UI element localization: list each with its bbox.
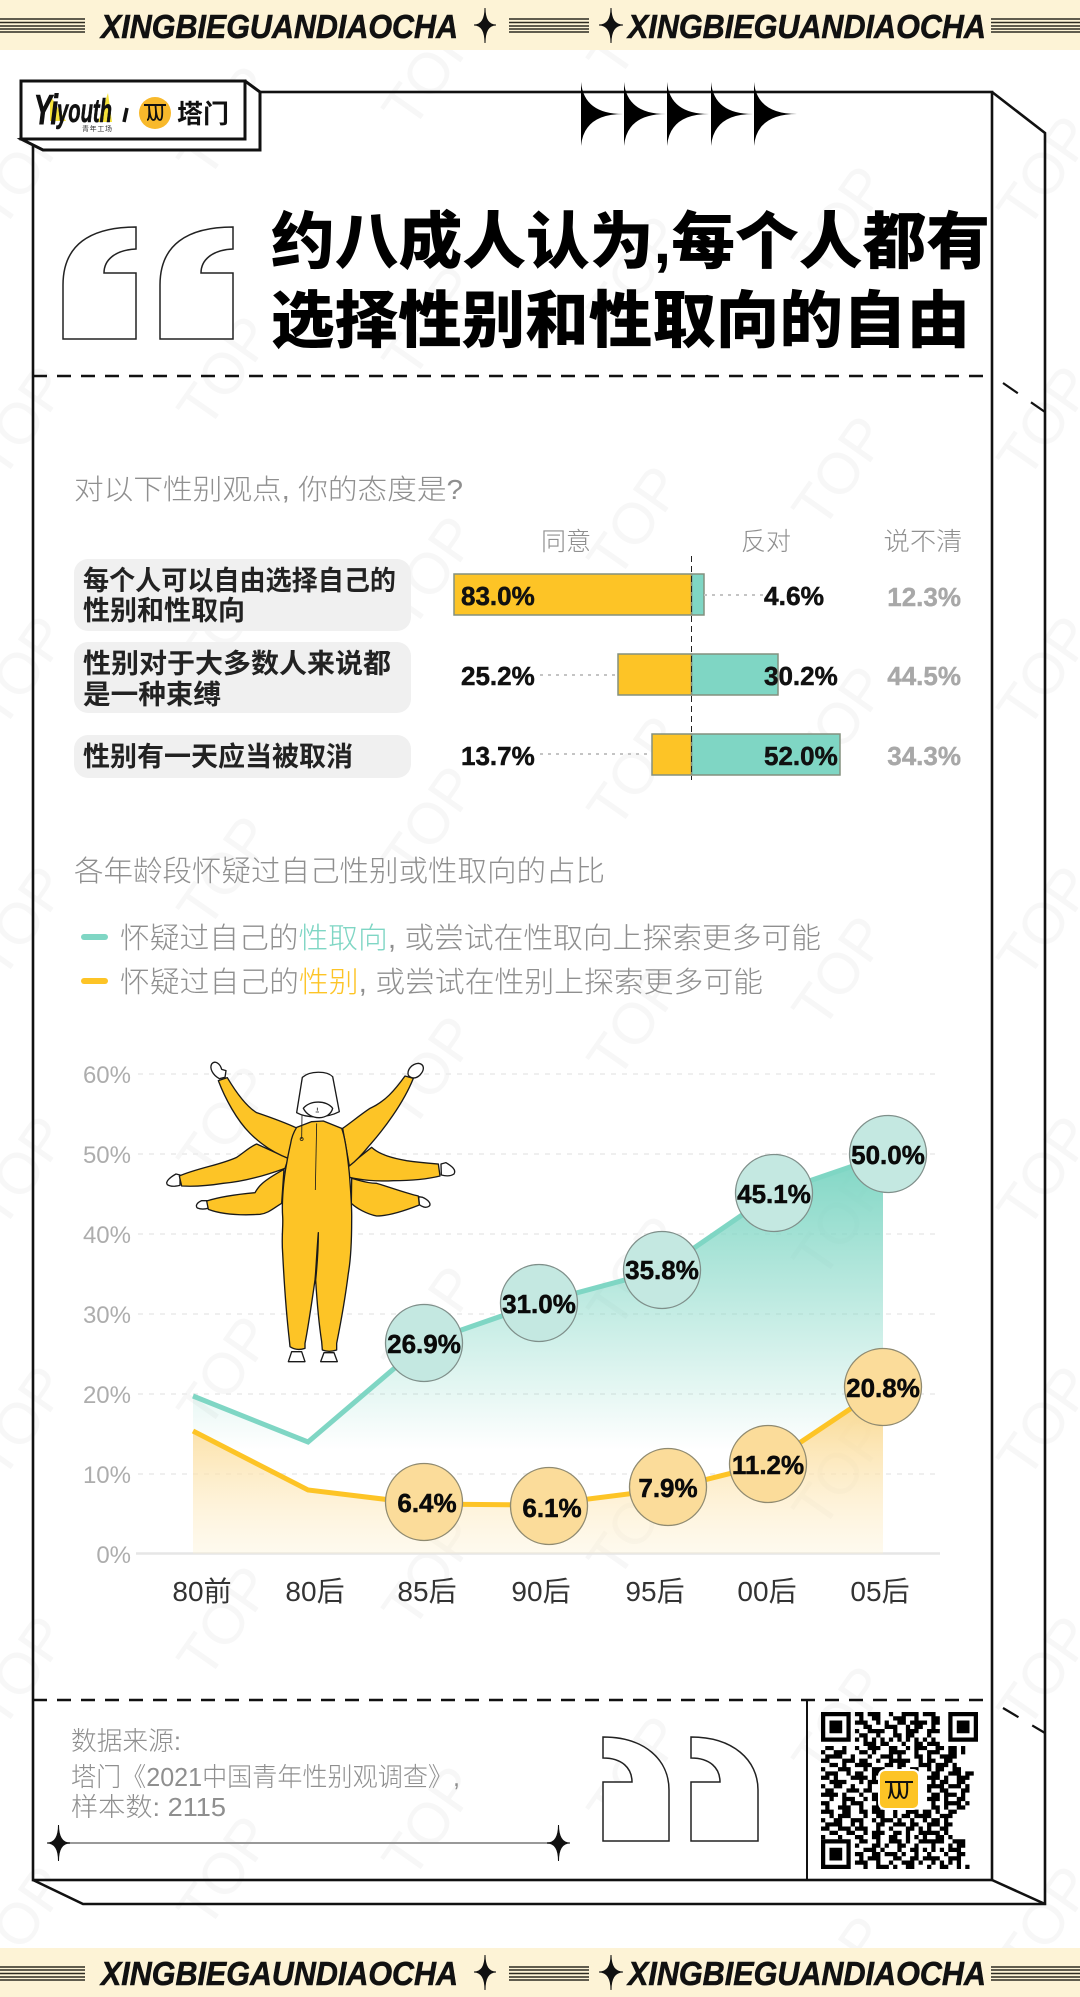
y axis labels xyxy=(83,1062,131,1569)
hands xyxy=(167,1062,455,1362)
statement 2: 性别对于大多数人来说都 xyxy=(83,649,391,679)
y axis labels: 60% xyxy=(83,1062,131,1089)
line chart xyxy=(83,1062,940,1607)
y axis labels: 20% xyxy=(83,1382,131,1409)
bar values: 44.5% xyxy=(887,661,961,691)
QR centre logo xyxy=(879,1770,919,1809)
illustration: many-armed figure in yellow suit xyxy=(167,1062,455,1362)
yellow values: 20.8% xyxy=(846,1373,920,1403)
yellow values: 7.9% xyxy=(638,1473,698,1503)
bar values: 30.2% xyxy=(764,661,838,691)
statement 3: 性别有一天应当被取消 xyxy=(83,742,353,772)
teal values: 26.9% xyxy=(387,1329,461,1359)
body and legs xyxy=(282,1121,352,1351)
bar row 3 xyxy=(540,734,840,775)
logo plate: 塔门 xyxy=(177,99,229,129)
legend: 怀疑过自己的性取向, 或尝试在性取向上探索更多可能 xyxy=(120,922,821,955)
logo plate xyxy=(21,81,260,150)
y axis labels: 40% xyxy=(83,1222,131,1249)
top banner: XINGBIEGUANDIAOCHA xyxy=(626,8,986,45)
panel: attitude bars xyxy=(74,556,961,780)
column headers: 说不清 xyxy=(884,528,962,556)
column headers xyxy=(541,528,962,556)
logo plate: youth xyxy=(56,92,112,129)
front arms xyxy=(218,1076,413,1166)
teal data points xyxy=(386,1116,926,1382)
bottom banner: XINGBIEGAUNDIAOCHA xyxy=(99,1955,458,1992)
zip xyxy=(315,1123,317,1190)
x axis labels: 80前 xyxy=(172,1576,232,1607)
x axis labels: 95后 xyxy=(625,1576,685,1607)
title: 约八成人认为,每个人都有 xyxy=(271,208,990,277)
teal values: 50.0% xyxy=(851,1140,925,1170)
data source text: 塔门《2021中国青年性别观调查》, xyxy=(71,1762,460,1792)
rear arms xyxy=(179,1144,440,1216)
logo plate: Yi xyxy=(34,86,59,133)
star rule xyxy=(47,1825,570,1861)
data source text: 数据来源: xyxy=(71,1726,181,1756)
top banner: XINGBIEGUANDIAOCHA xyxy=(99,8,458,45)
x axis labels: 85后 xyxy=(397,1576,457,1607)
age heading: 各年龄段怀疑过自己性别或性取向的占比 xyxy=(74,855,605,888)
teal values: 35.8% xyxy=(625,1255,699,1285)
yellow values: 6.4% xyxy=(397,1488,457,1518)
statement 2: 是一种束缚 xyxy=(83,680,221,710)
bar values: 25.2% xyxy=(461,661,535,691)
statement 1: 性别和性取向 xyxy=(83,596,245,626)
footer divider xyxy=(33,1699,992,1701)
hood and bucket xyxy=(297,1072,339,1117)
yellow data points xyxy=(386,1348,922,1544)
QR code xyxy=(821,1712,978,1869)
teal area and line xyxy=(193,1154,888,1554)
column headers: 反对 xyxy=(741,528,791,556)
y axis labels: 30% xyxy=(83,1302,131,1329)
yellow values: 11.2% xyxy=(732,1450,804,1480)
bar row 2 xyxy=(540,654,778,695)
statement 3 xyxy=(74,735,411,778)
opening quotation marks xyxy=(63,227,233,339)
top banner xyxy=(0,0,1080,50)
statement 2 xyxy=(74,642,411,713)
bar values: 52.0% xyxy=(764,741,838,771)
statement 1: 每个人可以自由选择自己的 xyxy=(83,566,396,596)
yellow values: 6.1% xyxy=(522,1493,582,1523)
data source text xyxy=(71,1726,460,1822)
legend xyxy=(81,922,821,999)
bar values: 12.3% xyxy=(887,582,961,612)
logo plate: 青年工场 xyxy=(82,124,112,133)
decorative arrows xyxy=(581,82,797,146)
teal values xyxy=(387,1140,925,1359)
statement 1 xyxy=(74,559,411,631)
bar values: 34.3% xyxy=(887,741,961,771)
closing quotation marks xyxy=(603,1737,758,1841)
bar values: 83.0% xyxy=(461,581,535,611)
title: 选择性别和性取向的自由 xyxy=(271,287,970,356)
column headers: 同意 xyxy=(541,528,591,556)
y axis labels: 10% xyxy=(83,1462,131,1489)
x axis labels: 00后 xyxy=(737,1576,797,1607)
bottom banner xyxy=(0,1948,1080,1997)
bar row 1 xyxy=(454,574,764,615)
x axis labels: 80后 xyxy=(285,1576,345,1607)
data source text: 样本数: 2115 xyxy=(71,1792,226,1822)
bar values: 13.7% xyxy=(461,741,535,771)
title xyxy=(271,208,990,356)
y axis labels: 0% xyxy=(96,1542,131,1569)
x axis labels: 05后 xyxy=(850,1576,910,1607)
bottom banner: XINGBIEGUANDIAOCHA xyxy=(626,1955,986,1992)
question heading: 对以下性别观点, 你的态度是? xyxy=(74,474,463,505)
x axis labels: 90后 xyxy=(511,1576,571,1607)
teal values: 31.0% xyxy=(502,1289,576,1319)
yellow area and line xyxy=(193,1387,883,1554)
bar values: 4.6% xyxy=(764,581,824,611)
x axis labels xyxy=(172,1576,910,1607)
yellow values xyxy=(397,1373,920,1523)
bar values xyxy=(461,581,961,771)
y axis labels: 50% xyxy=(83,1142,131,1169)
teal values: 45.1% xyxy=(737,1179,811,1209)
legend: 怀疑过自己的性别, 或尝试在性别上探索更多可能 xyxy=(120,966,763,999)
